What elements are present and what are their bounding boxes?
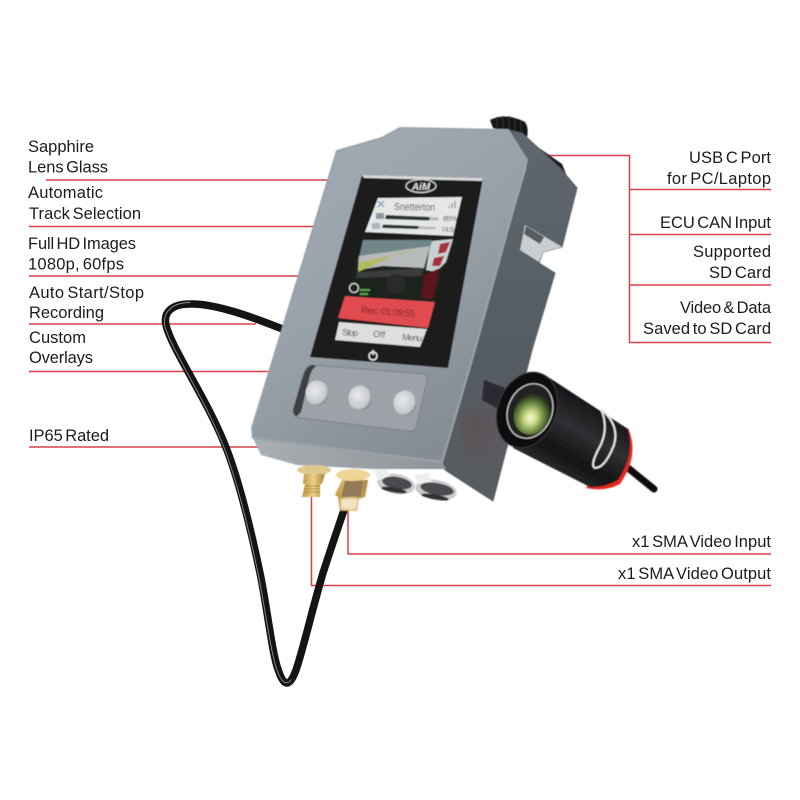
label: Custom Overlays: Custom [29, 329, 86, 347]
screen bezel [310, 175, 483, 368]
label: Supported SD Card: SD Card [709, 264, 771, 282]
label: Full HD Images [28, 235, 306, 276]
label: USB C Port: for PC/Laptop [667, 170, 771, 188]
button 3 [394, 390, 416, 416]
label: ECU CAN Input: ECU CAN Input [660, 214, 771, 232]
label: Custom Overlays: Overlays [29, 349, 93, 367]
label: Video and Data: Video & Data [680, 299, 772, 317]
mount [482, 380, 505, 410]
label: SMA Video Output [312, 495, 771, 586]
readings: 85% [443, 214, 457, 223]
soft keys [335, 322, 427, 347]
bottom labels [312, 495, 771, 586]
soft keys: Stop [342, 327, 359, 338]
bezel highlight [362, 175, 483, 181]
label: Custom Overlays [29, 329, 276, 372]
label: Full HD Images: 1080p, 60fps [28, 256, 124, 274]
connector trunk [548, 156, 630, 343]
button 1 [306, 380, 328, 406]
label: Full HD Images: Full HD Images [28, 235, 136, 253]
recess shadow [293, 365, 316, 416]
label: Auto Start/Stop Recording [29, 284, 256, 324]
SD card slot [520, 225, 562, 262]
bottom face [253, 438, 446, 469]
status panel [365, 197, 462, 236]
status panel: 74.5 [441, 225, 454, 234]
label: SMA Video Output: x1 SMA Video Output [618, 565, 771, 583]
camera body [513, 375, 630, 487]
record banner: Rec: 01:09:55 [361, 305, 415, 320]
logo [406, 180, 436, 193]
button 2 [348, 386, 372, 410]
coaxial cable [164, 302, 344, 683]
camera logo [593, 409, 615, 468]
label: Automatic Track Selection: Track Selection [29, 205, 141, 223]
soft keys: Off [373, 329, 386, 340]
left labels [28, 138, 335, 447]
port connectors [373, 469, 458, 503]
side face [442, 130, 577, 501]
label: Supported SD Card [629, 243, 771, 285]
label: IP65 Rated: IP65 Rated [29, 427, 109, 445]
gauges [372, 201, 455, 230]
camera [482, 363, 654, 489]
label: Sapphire Lens Glass: Sapphire [28, 138, 94, 156]
label: Sapphire Lens Glass: Lens Glass [28, 158, 108, 176]
track name: Snetterton [394, 201, 435, 214]
label: USB C Port [629, 149, 771, 190]
reflection on side [464, 404, 492, 456]
label: Auto Start/Stop Recording: Auto Start/Stop [29, 284, 144, 302]
record banner [338, 296, 435, 328]
rear ports [522, 136, 566, 176]
label: SMA Video Input: x1 SMA Video Input [632, 533, 771, 551]
keypad recess [294, 365, 427, 431]
camera cable [628, 468, 654, 489]
label: Sapphire Lens Glass [28, 138, 335, 180]
lens glass [507, 388, 557, 440]
label: Supported SD Card: Supported [693, 243, 771, 261]
label: Video and Data: Saved to SD Card [643, 320, 771, 338]
knob [490, 116, 528, 137]
right labels [548, 149, 772, 343]
label: SMA Video Input [348, 505, 771, 554]
label: Video and Data [629, 299, 772, 342]
SMA input connector [335, 469, 370, 511]
label: USB C Port: USB C Port [689, 149, 771, 167]
red ring [586, 428, 632, 489]
SMA output connector [297, 465, 331, 497]
soft keys: Menu [402, 332, 423, 343]
icon: power [369, 350, 377, 360]
lens ring [499, 377, 561, 445]
logo: AiM [411, 182, 431, 193]
video thumbnail [345, 237, 453, 302]
label: Automatic Track Selection [28, 184, 320, 226]
label: Auto Start/Stop Recording: Recording [29, 304, 104, 322]
front face [252, 128, 527, 462]
lens housing [486, 363, 568, 457]
label: Automatic Track Selection: Automatic [28, 184, 103, 202]
device [252, 116, 577, 511]
